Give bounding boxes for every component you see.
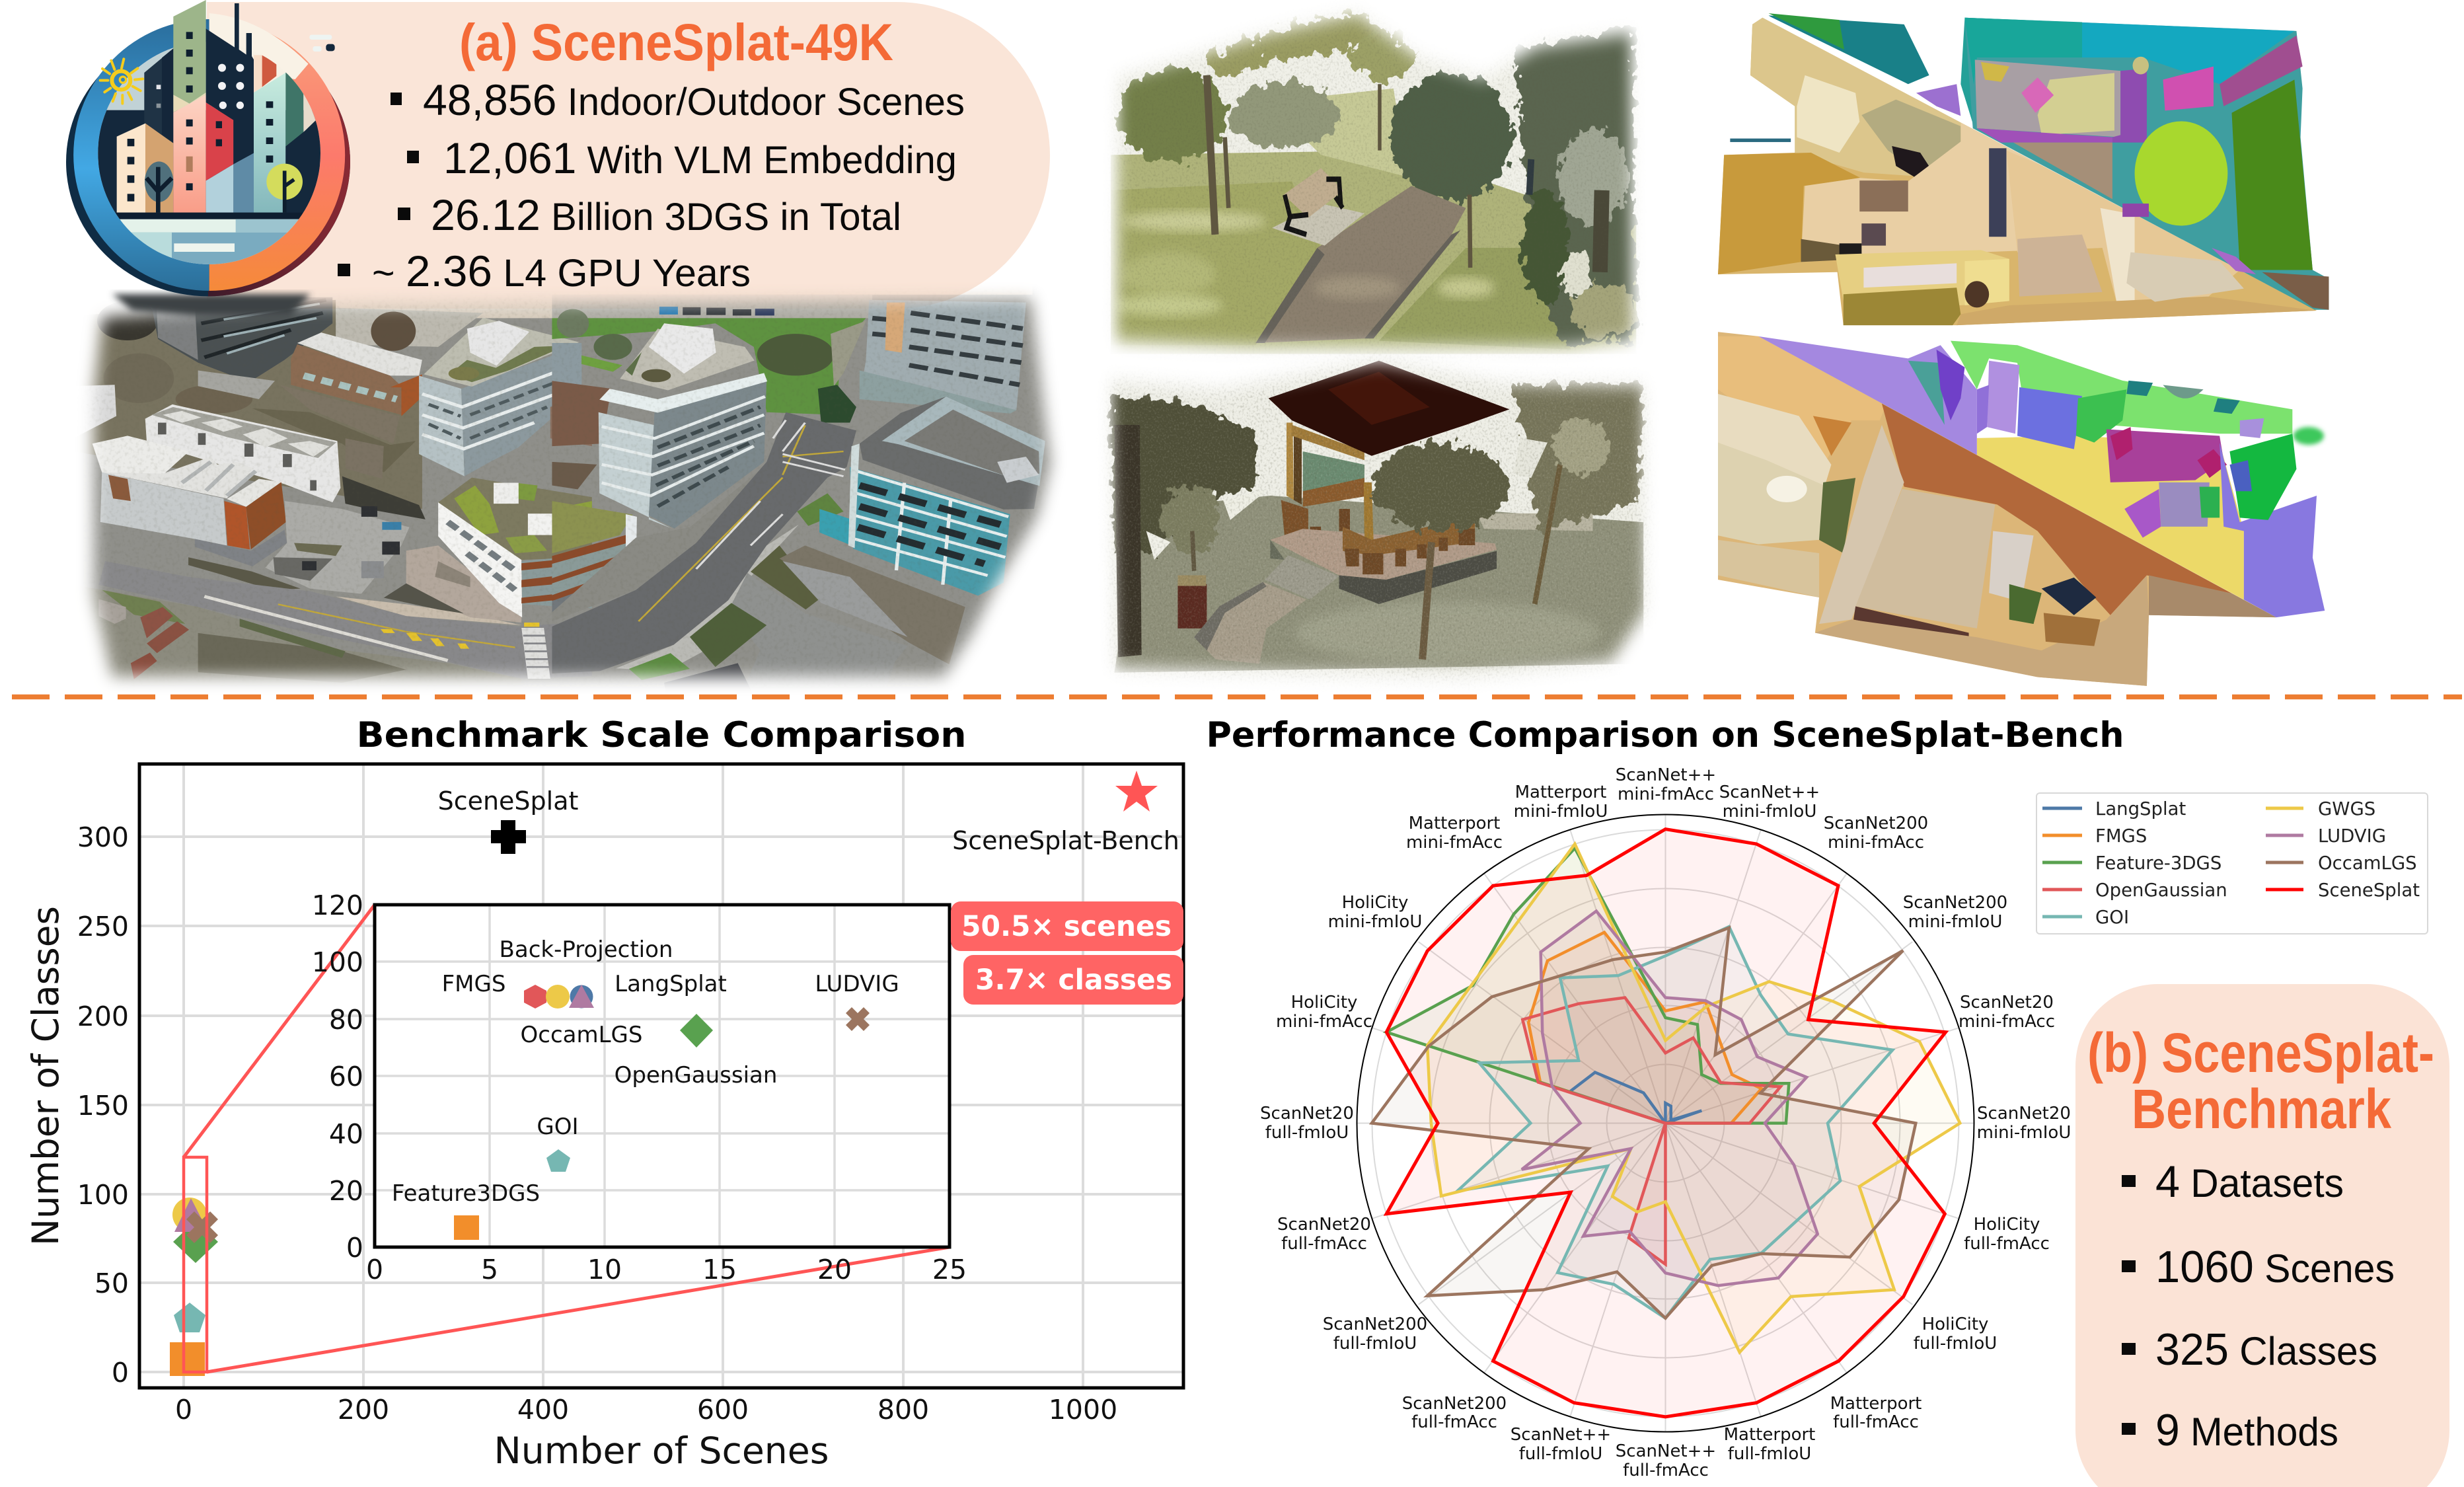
radar axis labels: ScanNet20 [1977, 1104, 2071, 1124]
zoom rectangle [184, 1157, 207, 1372]
labels: main scatter points [438, 786, 1179, 855]
axis ticks: y [77, 821, 129, 1389]
heading: (b) SceneSplat-Benchmark: Benchmark [2132, 1078, 2391, 1140]
ticks: inset y: 40 [329, 1118, 363, 1150]
labels: main scatter points: SceneSplat [438, 786, 578, 816]
texture [94, 303, 1043, 675]
marker: SceneSplat-Bench star [1115, 771, 1158, 812]
axis ticks: x: 400 [517, 1394, 569, 1426]
list: benchmark stats: 9 Methods [2155, 1405, 2338, 1455]
legend: radar methods: SceneSplat [2318, 880, 2420, 901]
chart: radar plot [1260, 765, 2071, 1480]
marker: OpenGaussian diamond [680, 1014, 713, 1048]
radar axis labels: full-fmIoU [1519, 1444, 1602, 1464]
radar axis labels: mini-fmAcc [1959, 1012, 2055, 1032]
radar axis labels: mini-fmAcc [1618, 784, 1714, 804]
ticks: inset x: 15 [702, 1254, 737, 1285]
axis ticks: y: 200 [77, 1001, 129, 1032]
radar axis labels: full-fmAcc [1281, 1234, 1367, 1254]
labels: main scatter points: SceneSplat-Bench [952, 826, 1179, 855]
legend: radar methods: Feature-3DGS [2095, 853, 2221, 874]
divider: dashed separator [8, 695, 2462, 699]
radar axis labels: full-fmIoU [1728, 1444, 1811, 1464]
callout: 50.5x scenes: 50.5× scenes [961, 910, 1172, 943]
axis ticks: x: 800 [877, 1394, 929, 1426]
list: dataset stats: 48,856 Indoor/Outdoor Scenes [423, 75, 965, 124]
list: dataset stats: 26.12 Billion 3DGS in Total [431, 190, 901, 239]
radar axis labels: mini-fmAcc [1276, 1012, 1372, 1032]
radar axis labels: mini-fmIoU [1723, 802, 1816, 821]
series: GOI [1457, 927, 1892, 1318]
frame [375, 905, 950, 1247]
marker: GOI pentagon [174, 1303, 205, 1332]
radar axis labels: Matterport [1724, 1425, 1815, 1445]
marker: Back-Projection triangle [569, 985, 594, 1008]
heading: (a) SceneSplat-49K: (a) SceneSplat-49K [459, 13, 893, 71]
photo: indoor scene with semantic segmentation (bottom) [1718, 332, 2325, 686]
radar axis labels: full-fmAcc [1623, 1461, 1709, 1480]
icon: city logo [66, 0, 350, 296]
labels: inset points: Feature3DGS [392, 1180, 540, 1207]
panel: SceneSplat-Benchmark stats [2075, 984, 2449, 1487]
heading: Performance Comparison: Performance Comparison on SceneSplat-Bench [1207, 715, 2124, 755]
axis ticks: x: 600 [697, 1394, 749, 1426]
list: dataset stats: 12,061 With VLM Embedding [443, 133, 957, 182]
list: benchmark stats: 1060 Scenes [2155, 1242, 2395, 1292]
axis ticks: y: 250 [77, 911, 129, 942]
axis ticks: y: 50 [94, 1268, 129, 1299]
axis ticks: y: 300 [77, 821, 129, 853]
marker: Feature3DGS square [170, 1342, 205, 1376]
city left part [85, 293, 592, 683]
labels: inset points: Back-Projection [500, 936, 673, 963]
labels: inset points [392, 936, 899, 1207]
radar axis labels: full-fmAcc [1964, 1234, 2050, 1254]
legend: radar methods: LangSplat [2095, 798, 2186, 820]
radar axis labels: full-fmIoU [1265, 1123, 1349, 1143]
ticks: inset x: 10 [587, 1254, 622, 1285]
labels: inset points: OpenGaussian [615, 1062, 777, 1088]
marker: LangSplat circle [570, 985, 593, 1009]
radar axis labels: Matterport [1409, 814, 1500, 833]
photo: aerial city reconstruction [66, 274, 1070, 703]
radar axis labels: ScanNet200 [1824, 814, 1928, 833]
heading: (b) SceneSplat-Benchmark [2087, 1022, 2434, 1140]
photo: indoor scene with semantic segmentation (top) [1718, 13, 2329, 325]
ticks: inset y: 60 [329, 1061, 363, 1092]
list: benchmark stats: 4 Datasets [2155, 1157, 2344, 1207]
ticks: inset y [312, 890, 363, 1264]
series: Feature-3DGS [1386, 848, 1789, 1123]
photo: outdoor gazebo [1103, 354, 1652, 685]
radar axis labels: ScanNet20 [1260, 1104, 1354, 1124]
callout: 3.7x classes [963, 955, 1183, 1005]
radar axis labels: ScanNet200 [1402, 1394, 1507, 1414]
legend: radar methods: LUDVIG [2318, 825, 2386, 847]
legend: radar methods: FMGS [2095, 825, 2147, 847]
labels: inset points: FMGS [442, 971, 505, 997]
marker: Feature3DGS [454, 1215, 479, 1240]
axis ticks: x: 200 [338, 1394, 389, 1426]
callout: 50.5x scenes [951, 901, 1183, 951]
legend: radar methods: GOI [2095, 907, 2129, 928]
radar axis labels: ScanNet200 [1903, 893, 2007, 913]
ticks: inset y: 0 [346, 1232, 363, 1264]
legend: radar methods: OccamLGS [2318, 853, 2417, 874]
radar axis labels: ScanNet++ [1511, 1425, 1611, 1445]
radar axis labels: HoliCity [1291, 993, 1357, 1012]
radar axis labels: Matterport [1830, 1394, 1922, 1414]
marker: FMGS hexagon [524, 985, 546, 1009]
chart: zoom connector lines [184, 905, 950, 1372]
callout: 3.7x classes: 3.7× classes [975, 964, 1172, 997]
legend: radar methods: GWGS [2318, 798, 2375, 820]
heading: Benchmark Scale Comparison: Benchmark Scale Comparison [357, 715, 966, 755]
radar axis labels: ScanNet20 [1277, 1215, 1371, 1235]
radar axis labels: mini-fmIoU [1908, 912, 2002, 932]
frame [139, 764, 1183, 1388]
ticks: inset x: 25 [932, 1254, 967, 1285]
axis title: x: Number of Scenes [494, 1430, 829, 1472]
axis ticks: y: 100 [77, 1179, 129, 1211]
axis ticks: x: 0 [175, 1394, 192, 1426]
ticks: inset y: 20 [329, 1175, 363, 1207]
labels: inset points: LUDVIG [815, 971, 899, 997]
series: LangSplat [1570, 1073, 1701, 1123]
radar axis labels: ScanNet++ [1616, 765, 1716, 785]
list: benchmark stats: 325 Classes [2155, 1324, 2377, 1375]
photo: outdoor park with bench [1110, 8, 1644, 356]
series: OccamLGS [1372, 928, 1916, 1318]
photo: dark building under the logo [112, 294, 311, 316]
series: GWGS [1427, 844, 1960, 1352]
ticks: inset x: 20 [817, 1254, 852, 1285]
series: SceneSplat [1386, 829, 1946, 1417]
ticks: inset y: 80 [329, 1004, 363, 1036]
series: OpenGaussian [1522, 997, 1781, 1264]
radar grid [1357, 814, 1974, 1431]
radar axis labels: full-fmIoU [1914, 1334, 1997, 1354]
axis ticks: x [175, 1394, 1117, 1426]
series: LUDVIG [1522, 911, 1818, 1285]
radar axis labels: ScanNet++ [1616, 1441, 1716, 1461]
radar axis labels: mini-fmIoU [1328, 912, 1422, 932]
ticks: inset x: 0 [366, 1254, 383, 1285]
chart: inset scatter [312, 890, 967, 1285]
axis title: y: Number of Classes [24, 906, 67, 1246]
series: FMGS [1528, 933, 1762, 1123]
marker: LUDVIG x [846, 1007, 870, 1031]
marker: SceneSplat plus [491, 820, 526, 854]
radar axis labels: HoliCity [1922, 1315, 1988, 1334]
ticks: inset y: 100 [312, 946, 363, 978]
labels: inset points: OccamLGS [521, 1022, 642, 1048]
radar axis labels: full-fmAcc [1411, 1412, 1497, 1432]
radar axis labels: mini-fmIoU [1514, 802, 1608, 821]
series fills [1372, 829, 1960, 1417]
radar series [1372, 829, 1960, 1417]
radar axis labels [1260, 765, 2071, 1480]
panel: SceneSplat-49K stats background [207, 2, 1050, 309]
radar axis labels: HoliCity [1342, 893, 1408, 913]
axis ticks: y: 0 [112, 1357, 129, 1389]
radar axis labels: mini-fmAcc [1406, 833, 1503, 853]
axis ticks: y: 150 [77, 1090, 129, 1122]
radar axis labels: ScanNet20 [1960, 993, 2054, 1012]
chart: benchmark scatter plot [24, 764, 1183, 1472]
radar outer circle [1357, 814, 1974, 1431]
city right part [552, 279, 1045, 703]
markers: overlapping methods [172, 1198, 218, 1263]
list: benchmark stats [2122, 1157, 2395, 1455]
axis ticks: x: 1000 [1049, 1394, 1117, 1426]
radar axis labels: ScanNet200 [1323, 1315, 1427, 1334]
legend: radar methods: OpenGaussian [2095, 880, 2227, 901]
list: dataset stats [338, 75, 965, 295]
ticks: inset x: 5 [481, 1254, 498, 1285]
marker: OccamLGS circle [546, 985, 570, 1009]
radar axis labels: mini-fmIoU [1977, 1123, 2071, 1143]
labels: inset points: LangSplat [615, 971, 727, 997]
radar axis labels: Matterport [1515, 782, 1606, 802]
list: dataset stats: ~ 2.36 L4 GPU Years [372, 247, 751, 295]
legend: radar methods [2036, 793, 2428, 934]
marker: GOI [546, 1149, 570, 1172]
radar axis labels: full-fmIoU [1333, 1334, 1417, 1354]
radar axis labels: mini-fmAcc [1828, 833, 1924, 853]
radar axis labels: HoliCity [1974, 1215, 2040, 1235]
ticks: inset y: 120 [312, 890, 363, 921]
radar axis labels: ScanNet++ [1719, 782, 1820, 802]
ticks: inset x [366, 1254, 967, 1285]
radar axis labels: full-fmAcc [1833, 1412, 1919, 1432]
labels: inset points: GOI [537, 1114, 579, 1140]
